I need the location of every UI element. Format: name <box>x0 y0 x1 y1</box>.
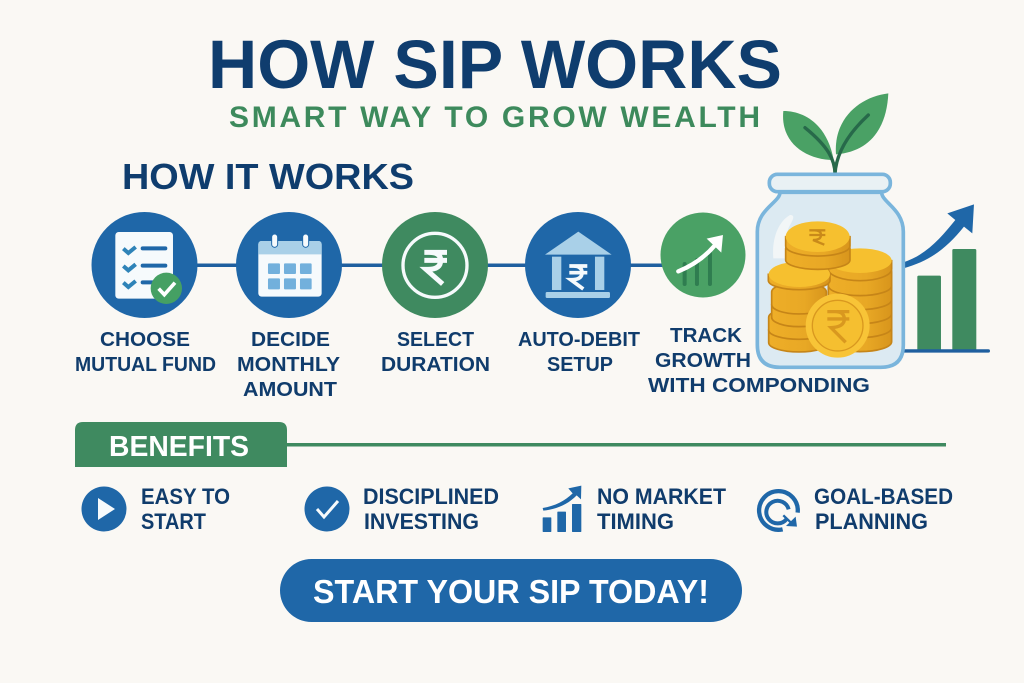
icon: calendar <box>258 234 322 297</box>
label: track growth with componding <box>648 324 870 397</box>
benefits banner: BENEFITS <box>109 431 249 463</box>
step 3: select duration <box>381 212 490 376</box>
icon: growth arrow <box>678 235 723 284</box>
benefit: disciplined investing: INVESTING <box>364 509 479 534</box>
connector line between steps <box>190 264 670 267</box>
label: track growth with componding: WITH COMPONDING <box>648 374 870 397</box>
label: track growth with componding: GROWTH <box>655 349 751 372</box>
icon: bank <box>545 232 612 298</box>
label: select duration <box>381 328 490 376</box>
benefit: no market timing: NO MARKET <box>597 484 727 509</box>
bar chart with arrow <box>900 204 990 353</box>
label: select duration: DURATION <box>381 353 490 376</box>
label: choose mutual fund <box>75 328 216 376</box>
label: choose mutual fund: MUTUAL FUND <box>75 353 216 376</box>
call to action button <box>280 559 742 622</box>
icon: checklist <box>115 232 182 304</box>
label: auto-debit setup: AUTO-DEBIT <box>518 328 640 351</box>
label: track growth with componding: TRACK <box>670 324 742 347</box>
label: decide monthly amount: DECIDE <box>251 328 330 351</box>
call to action button: START YOUR SIP TODAY! <box>313 573 709 610</box>
benefit: no market timing <box>543 484 727 534</box>
benefit: disciplined investing <box>304 484 499 534</box>
plant leaves <box>783 93 888 174</box>
benefit: easy to start <box>82 484 230 534</box>
label: decide monthly amount <box>237 328 340 401</box>
icon: rupee ring <box>403 233 467 297</box>
section heading: how it works: HOW IT WORKS <box>122 156 414 197</box>
benefit: goal-based planning: PLANNING <box>815 509 928 534</box>
benefit: disciplined investing: DISCIPLINED <box>363 484 499 509</box>
label: decide monthly amount: MONTHLY <box>237 353 340 376</box>
gold coin stacks <box>768 221 892 358</box>
illustration: money jar with plant and growth chart <box>757 93 990 367</box>
title: HOW SIP WORKS <box>208 26 782 103</box>
label: auto-debit setup: SETUP <box>547 353 613 376</box>
label: auto-debit setup <box>518 328 640 376</box>
step 2: decide monthly amount <box>236 212 342 401</box>
step 4: auto-debit setup <box>518 212 640 376</box>
subtitle: SMART WAY TO GROW WEALTH <box>229 101 760 134</box>
label: choose mutual fund: CHOOSE <box>100 328 190 351</box>
benefit: easy to start: EASY TO <box>141 484 230 509</box>
benefit: goal-based planning <box>759 484 953 534</box>
step 1: choose mutual fund <box>75 212 216 376</box>
benefit: goal-based planning: GOAL-BASED <box>814 484 953 509</box>
label: decide monthly amount: AMOUNT <box>243 378 337 401</box>
benefit: easy to start: START <box>141 509 207 534</box>
step 5: track growth with compounding <box>648 212 870 397</box>
benefit: no market timing: TIMING <box>597 509 674 534</box>
label: select duration: SELECT <box>397 328 474 351</box>
jar <box>757 174 903 367</box>
benefits banner <box>75 422 946 467</box>
